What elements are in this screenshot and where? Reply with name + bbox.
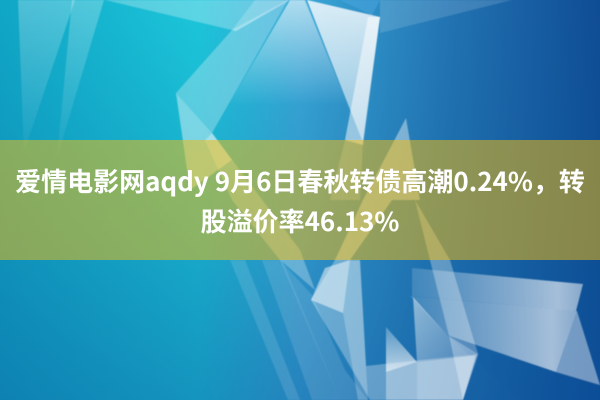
title: 爱情电影网aqdy 9月6日春秋转债高潮0.24%，转: [15, 162, 585, 199]
title: 股溢价率46.13%: [201, 202, 399, 239]
title: [15, 162, 585, 239]
translucent yellow title band: [0, 140, 600, 260]
